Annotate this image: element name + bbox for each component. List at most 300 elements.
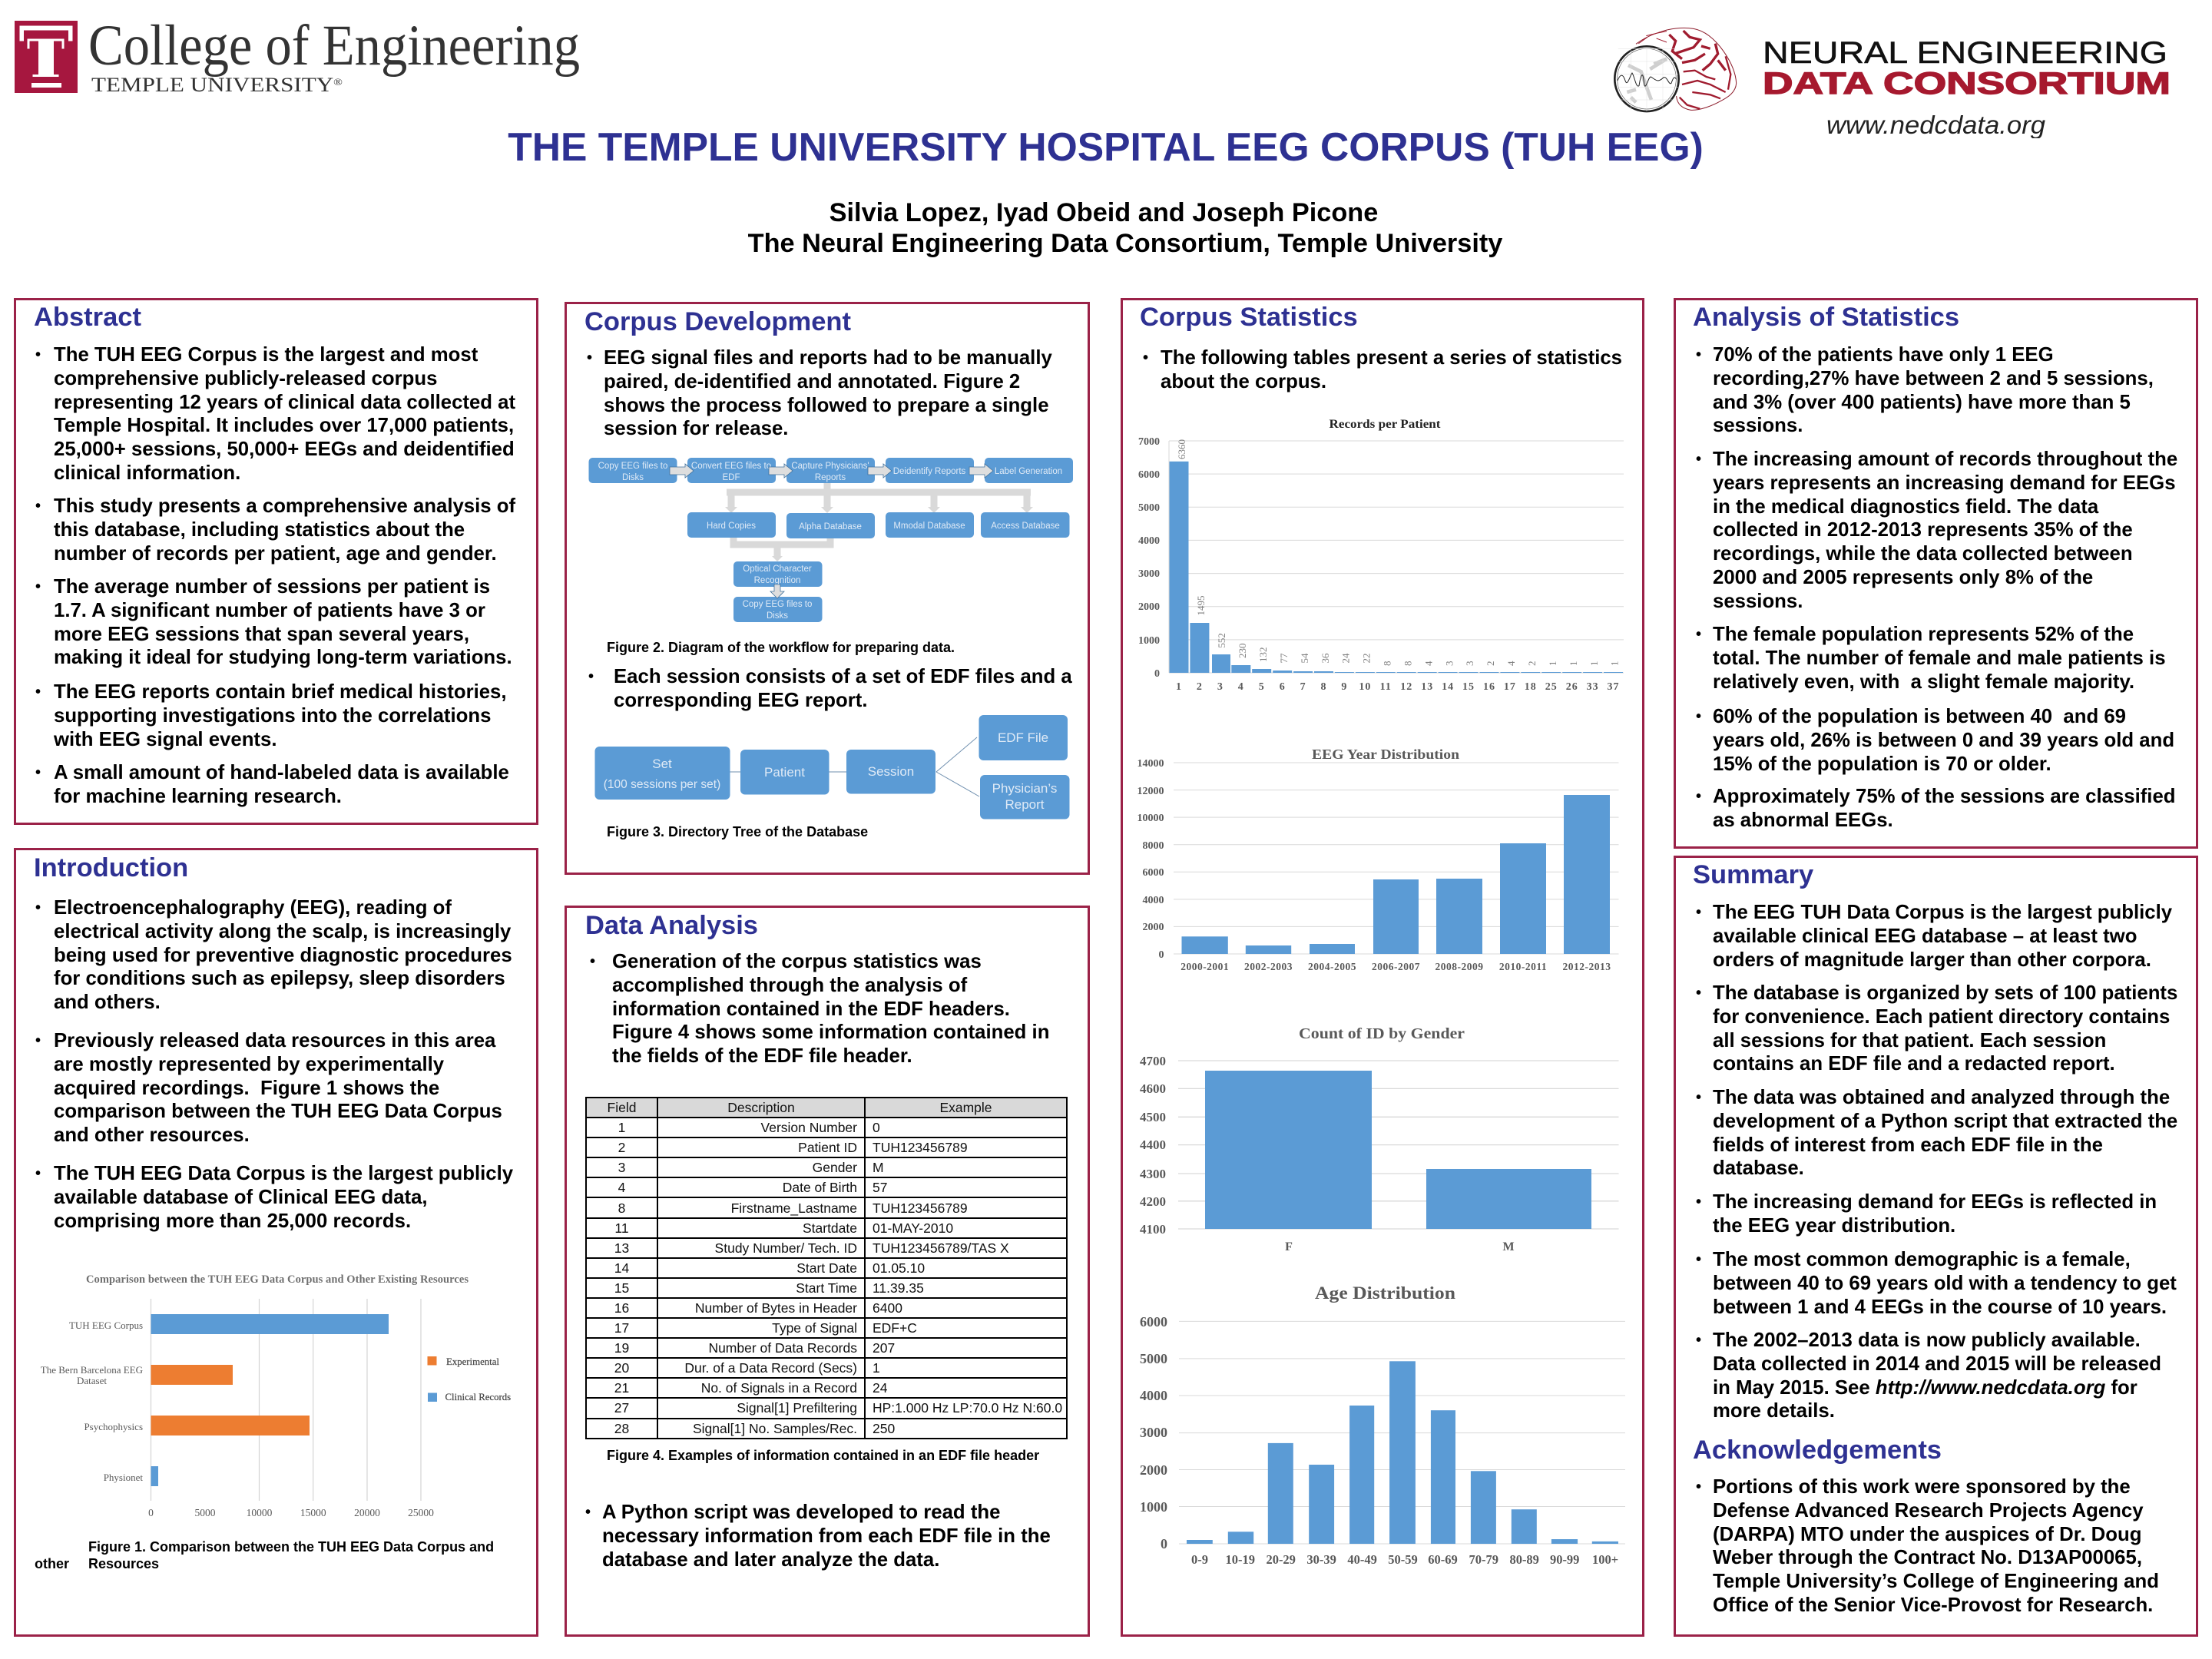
website link: www.nedcdata.org xyxy=(1826,111,2046,138)
text block: abstract bullet 5: A small amount of hand-labeled data is available xyxy=(54,762,509,783)
chart: EEG year distribution: 10000 xyxy=(1137,813,1164,824)
text block: summary bullet 1: orders of magnitude larger than other corpora. xyxy=(1713,949,2151,971)
wordmark: Temple University: TEMPLE UNIVERSITY xyxy=(91,74,294,96)
text block: summary bullet 6: in May 2015. See http://www.nedcdata.org for xyxy=(1713,1377,2137,1399)
panel: summary and acknowledgements: • xyxy=(1696,1332,1701,1349)
text block: abstract bullet 3: making it ideal for studying long-term variations. xyxy=(54,647,512,668)
heading: analysis of statistics: Analysis of Statistics xyxy=(1693,303,1959,332)
table: EDF header fields: 0 xyxy=(873,1120,880,1135)
heading: corpus development: Corpus Development xyxy=(584,307,851,336)
wordmark: Data Consortium: DATA CONSORTIUM xyxy=(1763,67,2171,101)
text block: abstract bullet 1: Temple Hospital. It includes over 17,000 patients, xyxy=(54,415,514,436)
chart: age distribution: 5000 xyxy=(1140,1351,1167,1366)
panel: summary and acknowledgements: • xyxy=(1696,985,1701,1002)
text block: corpus development bullet 1 xyxy=(587,347,1052,439)
table: EDF header fields: Signal[1] No. Samples/Rec. xyxy=(693,1421,857,1436)
panel: analysis of statistics: • xyxy=(1696,708,1701,725)
chart: records per patient: 2 xyxy=(1197,681,1203,693)
text block: summary bullet 5: between 40 to 69 years old with a tendency to get xyxy=(1713,1273,2177,1294)
chart: records per patient: 230 xyxy=(1237,644,1248,658)
chart: records per patient: 6000 xyxy=(1138,469,1160,481)
logo: Neural Engineering Data Consortium xyxy=(1614,28,2171,138)
text block: analysis bullet 1: sessions. xyxy=(1713,415,1803,436)
chart: records per patient: 7 xyxy=(1300,681,1306,693)
chart: comparison of corpora: Clinical Records xyxy=(445,1392,511,1402)
chart: EEG year distribution: 2004-2005 xyxy=(1308,961,1356,972)
heading: abstract: Abstract xyxy=(34,303,141,332)
text block: analysis bullet 4: 15% of the population is 70 or older. xyxy=(1713,753,2051,775)
chart: EEG year distribution: 2010-2011 xyxy=(1499,961,1547,972)
chart: age distribution: 1000 xyxy=(1140,1499,1167,1515)
diagram: directory tree: Report xyxy=(1005,797,1045,812)
text block: summary bullet 2: for convenience. Each patient directory contains xyxy=(1713,1006,2170,1028)
text block: corpus development bullet 2 xyxy=(588,666,1072,711)
table: EDF header fields: Dur. of a Data Record (Secs) xyxy=(684,1360,857,1376)
chart: EEG year distribution: 12000 xyxy=(1137,786,1164,797)
text block: summary bullet 6: Data collected in 2014 and 2015 will be released xyxy=(1713,1353,2161,1375)
table: EDF header fields: Startdate xyxy=(803,1220,857,1236)
chart: records per patient: 2 xyxy=(1485,661,1496,666)
panel: analysis of statistics: • xyxy=(1696,788,1701,805)
chart: count of ID by gender: M xyxy=(1502,1240,1515,1253)
chart: comparison of corpora xyxy=(41,1273,511,1518)
text block: analysis bullet 1: recording,27% have between 2 and 5 sessions, xyxy=(1713,368,2154,389)
caption: figure 3: Figure 3. Directory Tree of the Database xyxy=(607,824,868,839)
diagram: data preparation workflow: Mmodal Database xyxy=(893,522,965,531)
icon: brain with EEG lens xyxy=(1614,28,1737,111)
chart: records per patient: 16 xyxy=(1483,681,1495,693)
table: EDF header fields: 19 xyxy=(614,1340,629,1356)
authors and affiliation: Silvia Lopez, Iyad Obeid and Joseph Picone xyxy=(830,198,1378,227)
chart: comparison of corpora: Physionet xyxy=(104,1472,143,1483)
text block: acknowledgements: Office of the Senior Vice-Provost for Research. xyxy=(1713,1594,2153,1616)
panel: corpus development xyxy=(565,302,1090,875)
text block: corpus development bullet 1: paired, de-identified and annotated. Figure 2 xyxy=(604,371,1020,392)
authors and affiliation xyxy=(748,198,1502,258)
text block: data analysis bullet 1: information contained in the EDF headers. xyxy=(612,998,1010,1020)
text block: corpus development bullet 2: corresponding EEG report. xyxy=(614,690,868,711)
text block: analysis bullet 1: and 3% (over 400 patients) have more than 5 xyxy=(1713,392,2131,413)
table: EDF header fields: 20 xyxy=(614,1360,629,1376)
panel: analysis of statistics: • xyxy=(1696,626,1701,643)
chart: records per patient: 15 xyxy=(1462,681,1475,693)
panel: corpus development: • xyxy=(587,349,592,366)
chart: EEG year distribution: 14000 xyxy=(1137,758,1164,770)
panel: analysis of statistics xyxy=(1674,298,2198,849)
chart: EEG year distribution: EEG Year Distribution xyxy=(1312,747,1459,762)
chart: comparison of corpora: 15000 xyxy=(300,1507,326,1518)
chart: records per patient: 33 xyxy=(1587,681,1599,693)
text block: abstract bullet 1: The TUH EEG Corpus is the largest and most xyxy=(54,344,478,366)
text block: abstract bullet 4: with EEG signal events. xyxy=(54,729,276,750)
text block: data analysis bullet 1: the fields of the EDF file header. xyxy=(612,1045,912,1067)
text block: acknowledgements: Weber through the Contract No. D13AP00065, xyxy=(1713,1547,2142,1568)
text block: acknowledgements: Temple University’s College of Engineering and xyxy=(1713,1571,2159,1592)
panel: summary and acknowledgements xyxy=(1674,856,2198,1637)
text block: summary bullet 3 xyxy=(1696,1087,2177,1179)
text block: analysis bullet 3 xyxy=(1696,624,2166,693)
chart: records per patient: 1 xyxy=(1588,661,1600,666)
chart: records per patient: 4 xyxy=(1505,661,1517,666)
text block: summary bullet 6: more details. xyxy=(1713,1400,1835,1422)
diagram: data preparation workflow: Disks xyxy=(622,473,644,482)
chart: EEG year distribution: 2012-2013 xyxy=(1562,961,1611,972)
chart: records per patient: 4 xyxy=(1238,681,1244,693)
chart: age distribution: 6000 xyxy=(1140,1314,1167,1330)
chart: age distribution: 90-99 xyxy=(1550,1552,1579,1567)
table: EDF header fields: 24 xyxy=(873,1380,887,1396)
chart: EEG year distribution: 2008-2009 xyxy=(1435,961,1484,972)
chart: EEG year distribution: 2002-2003 xyxy=(1244,961,1293,972)
text block: summary bullet 6 xyxy=(1696,1330,2161,1422)
chart: records per patient: 22 xyxy=(1361,653,1372,664)
table: EDF header fields: Number of Data Records xyxy=(708,1340,857,1356)
text block: abstract bullet 1: 25,000+ sessions, 50,000+ EEGs and deidentified xyxy=(54,439,515,460)
chart: records per patient: Records per Patient xyxy=(1329,418,1441,431)
table: EDF header fields: Signal[1] Prefiltering xyxy=(737,1400,857,1416)
chart: records per patient: 5 xyxy=(1259,681,1265,693)
chart: records per patient: 7000 xyxy=(1138,436,1160,448)
chart: comparison of corpora: 10000 xyxy=(247,1507,273,1518)
text block: acknowledgements: (DARPA) MTO under the auspices of Dr. Doug xyxy=(1713,1524,2141,1545)
chart: records per patient: 3 xyxy=(1217,681,1224,693)
chart: count of ID by gender: 4500 xyxy=(1140,1110,1166,1124)
chart: records per patient: 8 xyxy=(1381,661,1393,666)
caption: figure 1 xyxy=(88,1539,494,1571)
text block: abstract bullet 1: comprehensive publicly-released corpus xyxy=(54,368,437,389)
text block: summary bullet 2: The database is organized by sets of 100 patients xyxy=(1713,982,2177,1004)
panel: analysis of statistics: • xyxy=(1696,451,1701,468)
text block: summary bullet 5: The most common demographic is a female, xyxy=(1713,1249,2131,1270)
chart: records per patient: 132 xyxy=(1257,647,1269,662)
text block: abstract bullet 3: 1.7. A significant number of patients have 3 or xyxy=(54,600,485,621)
text block: summary bullet 1 xyxy=(1696,902,2172,971)
chart: EEG year distribution: 2000-2001 xyxy=(1181,961,1229,972)
chart: age distribution: 40-49 xyxy=(1347,1552,1377,1567)
table: EDF header fields: 11 xyxy=(614,1220,629,1236)
chart: records per patient: 36 xyxy=(1320,653,1331,664)
diagram: data preparation workflow: Convert EEG files to xyxy=(691,462,771,471)
chart: records per patient: 1495 xyxy=(1195,596,1207,616)
text block: abstract bullet 4: The EEG reports contain brief medical histories, xyxy=(54,681,507,703)
text block: data analysis bullet 2: database and later analyze the data. xyxy=(602,1549,939,1571)
logo: Temple University College of Engineering xyxy=(15,14,580,96)
text block: data analysis bullet 2 xyxy=(585,1502,1051,1571)
chart: count of ID by gender: 4200 xyxy=(1140,1194,1166,1209)
heading: data analysis: Data Analysis xyxy=(585,911,758,940)
diagram: data preparation workflow: Access Database xyxy=(991,522,1060,531)
heading: summary: Summary xyxy=(1693,860,1813,889)
diagram: data preparation workflow: Deidentify Reports xyxy=(893,467,966,476)
wordmark: Neural Engineering: NEURAL ENGINEERING xyxy=(1763,36,2167,70)
text block: abstract bullet 2: This study presents a comprehensive analysis of xyxy=(54,495,515,517)
chart: records per patient: 18 xyxy=(1525,681,1537,693)
panel: summary and acknowledgements: • xyxy=(1696,1089,1701,1106)
table: EDF header fields: TUH123456789 xyxy=(873,1140,968,1155)
chart: age distribution: 100+ xyxy=(1592,1552,1618,1567)
chart: count of ID by gender: 4300 xyxy=(1140,1167,1166,1181)
panel: summary and acknowledgements: • xyxy=(1696,1251,1701,1268)
heading: acknowledgements: Acknowledgements xyxy=(1693,1435,1942,1465)
table: EDF header fields: 21 xyxy=(614,1380,629,1396)
icon: Temple T xyxy=(15,21,78,93)
chart: records per patient: 17 xyxy=(1504,681,1516,693)
text block: summary bullet 2: all sessions for that patient. Each session xyxy=(1713,1030,2106,1051)
table: EDF header fields: TUH123456789 xyxy=(873,1200,968,1216)
diagram: data preparation workflow: Copy EEG files to xyxy=(743,600,812,609)
text block: analysis bullet 2: The increasing amount of records throughout the xyxy=(1713,449,2177,470)
text block: summary bullet 5: between 1 and 4 EEGs in the course of 10 years. xyxy=(1713,1296,2167,1318)
table: EDF header fields: HP:1.000 Hz LP:70.0 Hz N:60.0 xyxy=(873,1400,1062,1416)
table: EDF header fields: 57 xyxy=(873,1180,887,1195)
diagram: directory tree: Physician’s xyxy=(992,781,1057,796)
text block: introduction bullet 3: available database of Clinical EEG data, xyxy=(54,1187,428,1208)
chart: records per patient: 3000 xyxy=(1138,568,1160,580)
panel: summary and acknowledgements: • xyxy=(1696,1194,1701,1210)
text block: introduction bullet 3: The TUH EEG Data Corpus is the largest publicly xyxy=(54,1163,513,1184)
chart: records per patient: 77 xyxy=(1278,653,1290,664)
diagram: data preparation workflow: Reports xyxy=(815,473,846,482)
chart: count of ID by gender: F xyxy=(1285,1240,1293,1253)
table: EDF header fields xyxy=(585,1097,1068,1439)
chart: comparison of corpora: 20000 xyxy=(354,1507,380,1518)
text block: abstract bullet 4 xyxy=(35,681,507,750)
chart: count of ID by gender: 4100 xyxy=(1140,1222,1166,1237)
text block: introduction bullet 2: Previously released data resources in this area xyxy=(54,1030,495,1051)
chart: records per patient: 2 xyxy=(1526,661,1538,666)
text block: summary bullet 2 xyxy=(1696,982,2177,1075)
chart: records per patient: 14 xyxy=(1442,681,1454,693)
text block: introduction bullet 1 xyxy=(35,897,512,1013)
text block: analysis bullet 5 xyxy=(1696,786,2176,831)
text block: summary bullet 5 xyxy=(1696,1249,2177,1318)
panel: introduction: • xyxy=(35,1165,41,1182)
text block: analysis bullet 4 xyxy=(1696,706,2174,775)
text block: introduction bullet 1: and others. xyxy=(54,992,161,1013)
caption: figure 4: Figure 4. Examples of information contained in an EDF file header xyxy=(607,1448,1039,1463)
panel: analysis of statistics: • xyxy=(1696,346,1701,363)
chart: comparison of corpora: Psychophysics xyxy=(84,1421,143,1432)
text block: introduction bullet 2: are mostly represented by experimentally xyxy=(54,1054,444,1075)
chart: records per patient: 11 xyxy=(1380,681,1392,693)
text block: analysis bullet 5: as abnormal EEGs. xyxy=(1713,810,1893,831)
text block: introduction bullet 2: and other resources. xyxy=(54,1124,250,1146)
chart: records per patient xyxy=(1138,418,1624,693)
table: EDF header fields: EDF+C xyxy=(873,1320,917,1336)
panel: corpus statistics: • xyxy=(1143,349,1148,366)
diagram: directory tree: EDF File xyxy=(998,730,1048,745)
text block: introduction bullet 2: acquired recordings. Figure 1 shows the xyxy=(54,1078,439,1099)
table: EDF header fields: Start Time xyxy=(796,1280,857,1296)
table: EDF header fields: 207 xyxy=(873,1340,895,1356)
diagram: data preparation workflow: Alpha Database xyxy=(799,522,862,531)
table: EDF header fields: Field xyxy=(608,1100,636,1115)
text block: introduction bullet 1: being used for preventive diagnostic procedures xyxy=(54,945,512,966)
table: EDF header fields: Date of Birth xyxy=(783,1180,857,1195)
text block: analysis bullet 2 xyxy=(1696,449,2177,612)
table: EDF header fields: Patient ID xyxy=(798,1140,857,1155)
text block: abstract bullet 4: supporting investigations into the correlations xyxy=(54,705,491,727)
chart: age distribution xyxy=(1140,1283,1625,1567)
text block: corpus statistics intro: The following tables present a series of statistics xyxy=(1161,347,1622,369)
text block: acknowledgements: Defense Advanced Research Projects Agency xyxy=(1713,1500,2144,1522)
chart: comparison of corpora: TUH EEG Corpus xyxy=(69,1320,143,1331)
table: EDF header fields: 27 xyxy=(614,1400,629,1416)
text block: analysis bullet 3: relatively even, with a slight female majority. xyxy=(1713,671,2134,693)
chart: age distribution: 50-59 xyxy=(1388,1552,1418,1567)
chart: age distribution: 0 xyxy=(1161,1536,1167,1551)
diagram: data preparation workflow: EDF xyxy=(722,473,740,482)
chart: records per patient: 24 xyxy=(1339,653,1352,664)
chart: records per patient: 1000 xyxy=(1138,635,1160,647)
diagram: data preparation workflow: Capture Physicians' xyxy=(791,462,869,471)
diagram: directory tree xyxy=(594,715,1069,819)
chart: age distribution: 3000 xyxy=(1140,1425,1167,1440)
table: EDF header fields: 01-MAY-2010 xyxy=(873,1220,953,1236)
table: EDF header fields: 3 xyxy=(618,1160,625,1175)
table: EDF header fields: Description xyxy=(727,1100,795,1115)
diagram: directory tree: Patient xyxy=(764,765,805,780)
text block: corpus statistics intro: about the corpus. xyxy=(1161,371,1326,392)
table: EDF header fields: 2 xyxy=(618,1140,625,1155)
text block: abstract bullet 2: number of records per patient, age and gender. xyxy=(54,543,497,565)
chart: age distribution: 0-9 xyxy=(1191,1552,1208,1567)
panel: corpus statistics xyxy=(1121,298,1644,1637)
chart: EEG year distribution xyxy=(1137,747,1619,972)
table: EDF header fields: 01.05.10 xyxy=(873,1260,925,1276)
text block: introduction bullet 3: comprising more than 25,000 records. xyxy=(54,1210,411,1232)
table: EDF header fields: Gender xyxy=(813,1160,857,1175)
panel: abstract: • xyxy=(35,578,41,595)
table: EDF header fields: 11.39.35 xyxy=(873,1280,924,1296)
text block: analysis bullet 1: 70% of the patients have only 1 EEG xyxy=(1713,344,2054,366)
table: EDF header fields: TUH123456789/TAS X xyxy=(873,1240,1009,1256)
text block: analysis bullet 2: years represents an increasing demand for EEGs xyxy=(1713,472,2176,494)
chart: comparison of corpora: Experimental xyxy=(446,1356,499,1367)
heading: corpus statistics: Corpus Statistics xyxy=(1140,303,1358,332)
diagram: data preparation workflow xyxy=(588,458,1073,622)
chart: age distribution: Age Distribution xyxy=(1315,1283,1455,1303)
wordmark: Temple University: ® xyxy=(333,76,343,88)
chart: count of ID by gender: 4700 xyxy=(1140,1054,1166,1068)
text block: summary bullet 3: development of a Python script that extracted the xyxy=(1713,1111,2177,1132)
panel: corpus development: • xyxy=(588,668,594,685)
chart: records per patient: 9 xyxy=(1341,681,1347,693)
panel: abstract: • xyxy=(35,346,41,363)
table: EDF header fields: 16 xyxy=(614,1300,629,1316)
chart: EEG year distribution: 8000 xyxy=(1143,840,1164,852)
text block: abstract bullet 3 xyxy=(35,576,512,668)
text block: abstract bullet 3: The average number of sessions per patient is xyxy=(54,576,490,598)
table: EDF header fields: Start Date xyxy=(796,1260,857,1276)
text block: summary bullet 3: database. xyxy=(1713,1157,1804,1179)
chart: comparison of corpora: 5000 xyxy=(195,1507,216,1518)
text block: analysis bullet 3: The female population represents 52% of the xyxy=(1713,624,2134,645)
text block: corpus development bullet 1: session for release. xyxy=(604,418,788,439)
diagram: directory tree: (100 sessions per set) xyxy=(604,778,720,791)
chart: age distribution: 30-39 xyxy=(1306,1552,1336,1567)
text block: data analysis bullet 1: Generation of the corpus statistics was xyxy=(612,951,982,972)
chart: records per patient: 12 xyxy=(1400,681,1412,693)
table: EDF header fields: 4 xyxy=(618,1180,625,1195)
chart: records per patient: 1 xyxy=(1547,661,1558,666)
text block: summary bullet 3: The data was obtained and analyzed through the xyxy=(1713,1087,2170,1108)
text block: introduction bullet 2: comparison between the TUH EEG Data Corpus xyxy=(54,1101,502,1122)
text block: acknowledgements: Portions of this work were sponsored by the xyxy=(1713,1476,2131,1498)
table: EDF header fields: Firstname_Lastname xyxy=(731,1200,857,1216)
chart: records per patient: 8 xyxy=(1402,661,1413,666)
chart: count of ID by gender: 4400 xyxy=(1140,1137,1166,1152)
text block: corpus statistics intro xyxy=(1143,347,1622,392)
chart: records per patient: 10 xyxy=(1359,681,1371,693)
diagram: data preparation workflow: Copy EEG files to xyxy=(598,462,667,471)
panel: abstract xyxy=(14,298,538,825)
table: EDF header fields: 28 xyxy=(614,1421,629,1436)
text block: introduction bullet 1: for conditions such as epilepsy, sleep disorders xyxy=(54,968,505,989)
text block: analysis bullet 5: Approximately 75% of the sessions are classified xyxy=(1713,786,2176,807)
chart: EEG year distribution: 6000 xyxy=(1143,867,1164,879)
text block: abstract bullet 2 xyxy=(35,495,516,565)
text block: summary bullet 4: The increasing demand for EEGs is reflected in xyxy=(1713,1191,2157,1213)
caption: figure 1: Resources xyxy=(88,1556,159,1571)
chart: age distribution: 10-19 xyxy=(1226,1552,1255,1567)
text block: abstract bullet 1 xyxy=(35,344,515,484)
chart: records per patient: 2000 xyxy=(1138,601,1160,613)
chart: records per patient: 6360 xyxy=(1176,439,1187,459)
text block: analysis bullet 1 xyxy=(1696,344,2154,436)
text block: data analysis bullet 2: necessary information from each EDF file in the xyxy=(602,1525,1051,1547)
text block: summary bullet 1: The EEG TUH Data Corpus is the largest publicly xyxy=(1713,902,2172,923)
panel: introduction: • xyxy=(35,1032,41,1049)
panel: introduction xyxy=(14,848,538,1637)
diagram: data preparation workflow: Disks xyxy=(767,611,788,621)
chart: records per patient: 5000 xyxy=(1138,502,1160,514)
table: EDF header fields: 6400 xyxy=(873,1300,902,1316)
heading: introduction: Introduction xyxy=(34,853,188,882)
chart: age distribution: 20-29 xyxy=(1266,1552,1296,1567)
caption: figure 1 continuation: other xyxy=(35,1556,69,1571)
chart: age distribution: 60-69 xyxy=(1428,1552,1458,1567)
chart: records per patient: 3 xyxy=(1464,661,1475,666)
text block: introduction bullet 2 xyxy=(35,1030,502,1146)
panel: data analysis: • xyxy=(590,953,595,970)
chart: age distribution: 80-89 xyxy=(1509,1552,1539,1567)
chart: records per patient: 37 xyxy=(1607,681,1619,693)
text block: analysis bullet 2: collected in 2012-2013 represents 35% of the xyxy=(1713,519,2133,541)
diagram: data preparation workflow: Hard Copies xyxy=(707,522,756,531)
text block: summary bullet 1: available clinical EEG database – at least two xyxy=(1713,926,2137,947)
text block: abstract bullet 1: clinical information. xyxy=(54,462,240,484)
panel: abstract: • xyxy=(35,498,41,515)
text block: abstract bullet 1: representing 12 years of clinical data collected at xyxy=(54,392,515,413)
table: EDF header fields: 13 xyxy=(614,1240,629,1256)
chart: records per patient: 552 xyxy=(1216,633,1227,648)
text block: analysis bullet 2: 2000 and 2005 represents only 8% of the xyxy=(1713,567,2093,588)
panel: data analysis: • xyxy=(585,1504,591,1521)
chart: records per patient: 1 xyxy=(1608,661,1621,666)
panel: introduction: • xyxy=(35,899,41,916)
caption: figure 1: Figure 1. Comparison between the TUH EEG Data Corpus and xyxy=(88,1539,494,1555)
chart: count of ID by gender: Count of ID by Gender xyxy=(1299,1026,1465,1042)
chart: records per patient: 8 xyxy=(1321,681,1327,693)
text block: summary bullet 3: fields of interest from each EDF file in the xyxy=(1713,1134,2103,1156)
text block: summary bullet 6: The 2002–2013 data is now publicly available. xyxy=(1713,1330,2141,1351)
panel: data analysis xyxy=(565,906,1090,1637)
text block: introduction bullet 1: Electroencephalography (EEG), reading of xyxy=(54,897,452,919)
table: EDF header fields: M xyxy=(873,1160,884,1175)
table: EDF header fields: 8 xyxy=(618,1200,625,1216)
text block: abstract bullet 3: more EEG sessions that span several years, xyxy=(54,624,469,645)
